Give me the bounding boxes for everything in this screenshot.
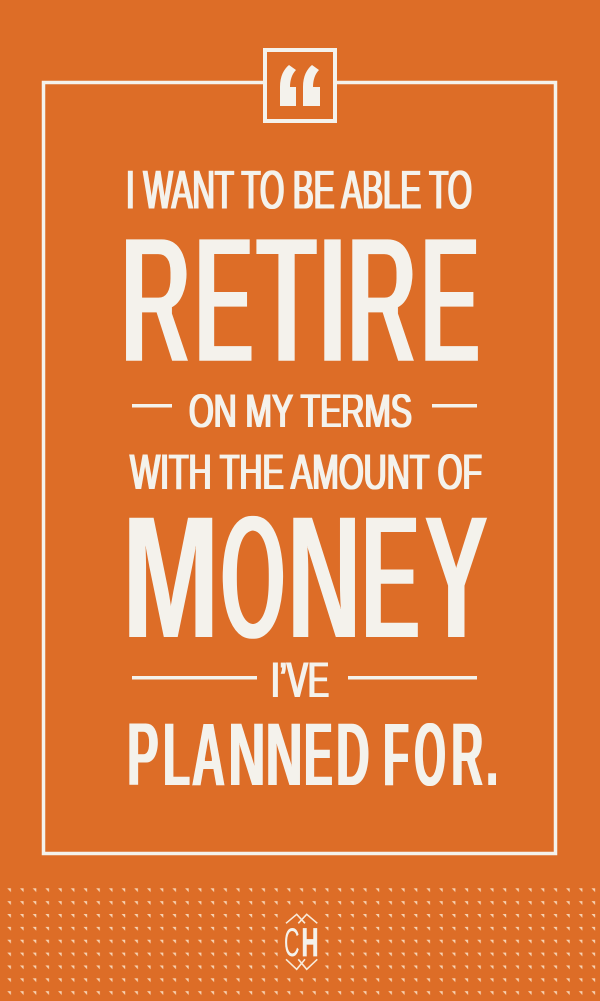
heading: MONEY: N — [288, 475, 361, 679]
heading: RETIRE: T — [256, 198, 317, 404]
frame — [44, 82, 556, 854]
text: . — [486, 704, 498, 806]
line: planned for: O — [414, 704, 446, 806]
line: I've: I’VE — [271, 652, 329, 708]
logo: H — [302, 921, 318, 965]
line: planned for: D — [336, 704, 369, 806]
line: planned for: L — [163, 704, 190, 806]
line: planned for: A — [192, 704, 225, 806]
line: planned for: N — [266, 704, 302, 806]
quote icon — [265, 50, 335, 121]
line: planned for: N — [229, 704, 265, 806]
heading: MONEY: O — [220, 475, 286, 679]
logo — [284, 912, 321, 972]
heading: MONEY: M — [122, 475, 219, 679]
line: planned for: E — [304, 704, 333, 806]
heading: MONEY: E — [361, 475, 420, 679]
line: planned for: R — [451, 704, 483, 806]
line: planned for: P — [127, 704, 158, 806]
dot pattern band — [0, 888, 600, 1001]
heading: RETIRE: I — [319, 198, 346, 404]
text: E — [420, 198, 480, 404]
heading: RETIRE: E — [194, 198, 254, 404]
heading: RETIRE: R — [120, 198, 191, 404]
line: on my terms: ON MY TERMS — [189, 384, 412, 437]
heading: MONEY: Y — [423, 475, 490, 679]
line: I've — [132, 652, 477, 708]
logo: C — [284, 921, 300, 965]
heading: RETIRE: R — [347, 198, 417, 404]
line: planned for: F — [383, 704, 409, 806]
